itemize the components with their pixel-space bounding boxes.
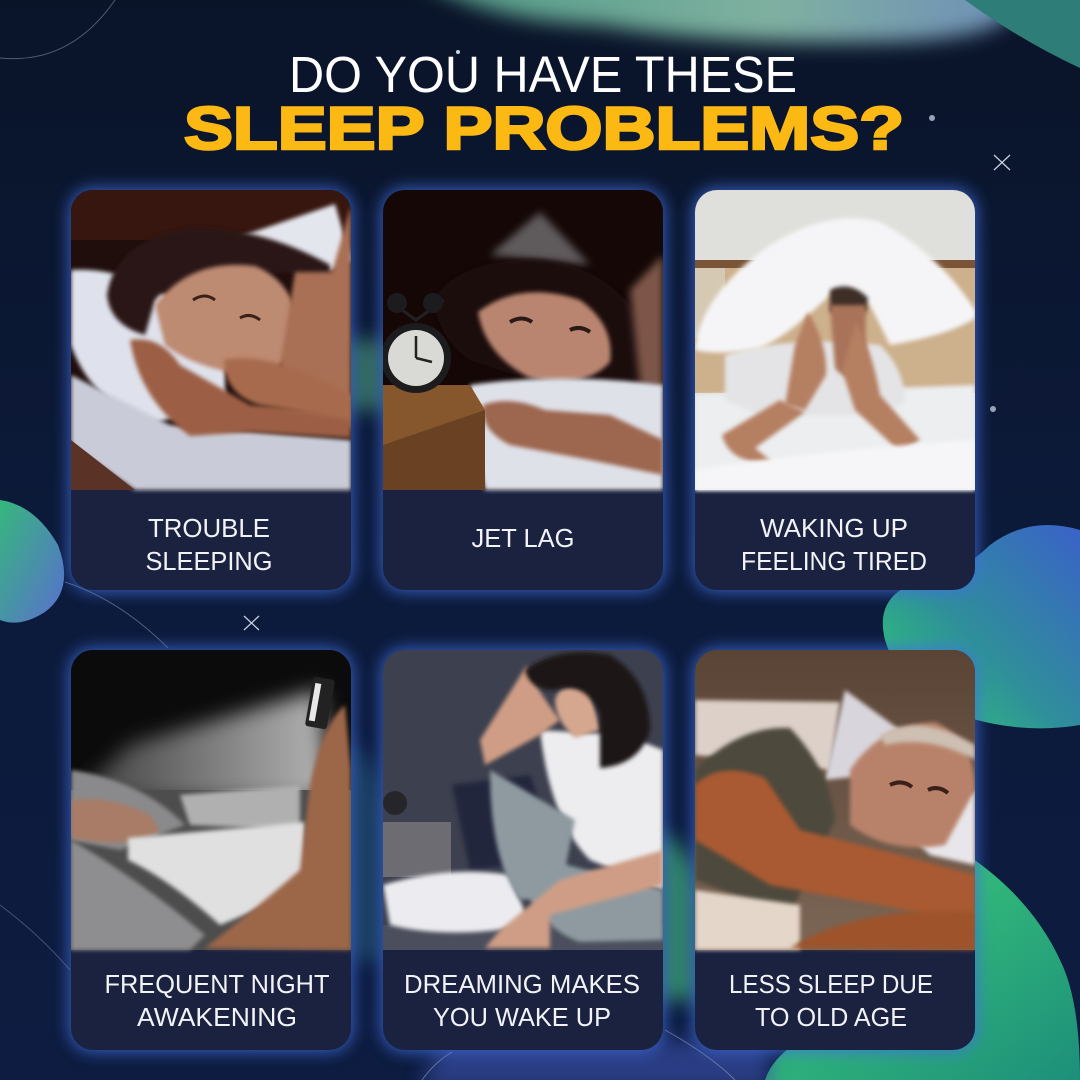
caption: LESS SLEEP DUE [729, 969, 933, 999]
photo: woman sitting on bed [383, 650, 663, 950]
caption [106, 974, 329, 1026]
caption: TROUBLE [148, 513, 270, 543]
caption: SLEEPING [146, 546, 272, 576]
caption [730, 974, 932, 1026]
caption: FEELING TIRED [741, 546, 927, 576]
caption [146, 518, 271, 570]
photo: woman awake in bed [71, 190, 351, 490]
card: less sleep due to old age [693, 648, 977, 1052]
card: dreaming makes you wake up [381, 648, 665, 1052]
title [184, 46, 904, 162]
caption: JET LAG [472, 523, 574, 553]
card: jet lag [381, 188, 665, 592]
card: waking up feeling tired [693, 188, 977, 592]
photo: man on phone in bed [71, 650, 351, 950]
card: trouble sleeping [69, 188, 353, 592]
caption: WAKING UP [760, 513, 908, 543]
caption: DREAMING MAKES [404, 969, 640, 999]
caption [743, 518, 926, 570]
title line 1: DO YOU HAVE THESE [289, 46, 797, 103]
title line 2: SLEEP PROBLEMS? [184, 95, 904, 162]
caption: AWAKENING [137, 1002, 297, 1032]
photo: man under pillow [695, 190, 975, 490]
caption: TO OLD AGE [755, 1002, 907, 1032]
caption [406, 974, 639, 1026]
photo: older man awake in bed [695, 650, 975, 950]
caption: YOU WAKE UP [433, 1002, 611, 1032]
icon: alarm clock [381, 293, 451, 393]
caption: FREQUENT NIGHT [104, 969, 330, 999]
card: frequent night awakening [69, 648, 353, 1052]
photo: woman beside alarm clock [381, 190, 663, 490]
